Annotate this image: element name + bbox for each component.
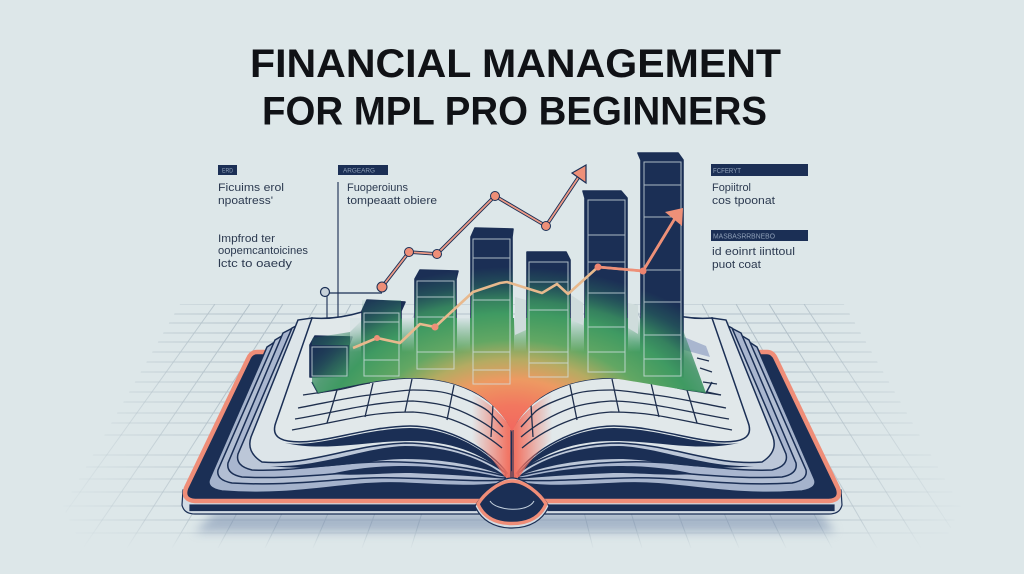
left text callouts: ERD (222, 168, 234, 174)
heat gradient over pages and bars (312, 272, 706, 432)
middle text callout (338, 165, 437, 207)
right text callouts: Fopiitrol (712, 182, 751, 194)
lower trend line with arrow (353, 208, 683, 348)
right pages stack (512, 312, 815, 492)
right text callouts: puot coat (712, 259, 761, 271)
book: lower cover edge (182, 490, 842, 514)
left text callouts (218, 165, 309, 270)
left text callouts: lctc to oaedy (218, 258, 293, 270)
upper trend line with arrow (320, 165, 586, 296)
left text callouts: npoatress' (218, 195, 273, 207)
floor grid (70, 304, 946, 544)
left text callouts: Ficuims erol (218, 182, 284, 194)
right text callouts: FCFERYT (713, 168, 742, 175)
leader lines (327, 182, 338, 338)
bar chart: navy bars (310, 153, 683, 385)
grid bottom fade (0, 522, 1024, 550)
book: navy cover with coral edge (185, 352, 839, 501)
right text callouts: id eoinrt iinttoul (712, 246, 795, 258)
book spine bump (475, 478, 549, 528)
right text callouts: cos tpoonat (712, 195, 775, 207)
title (250, 42, 781, 134)
page margin ticks and shadow, right (684, 337, 721, 395)
left pages stack (209, 312, 512, 492)
middle text callout: ARGEARG (343, 168, 375, 174)
middle text callout: Fuoperoiuns (347, 182, 408, 194)
right text callouts (711, 164, 808, 271)
soft pale fade at the top of gaps between bars (350, 318, 640, 352)
book shadow (195, 512, 835, 532)
middle text callout: tompeaatt obiere (347, 195, 437, 207)
left text callouts: oopemcantoicines (218, 245, 309, 257)
title: FINANCIAL MANAGEMENT (250, 42, 781, 86)
dark corner on first bar (310, 345, 349, 377)
pale gaps between bars (515, 295, 638, 335)
title: FOR MPL PRO BEGINNERS (262, 90, 767, 134)
right text callouts: MASBASRRBNEBO (713, 234, 776, 240)
book spine line (511, 430, 513, 480)
bar outlines and rows (312, 162, 681, 384)
left text callouts: Impfrod ter (218, 233, 275, 245)
